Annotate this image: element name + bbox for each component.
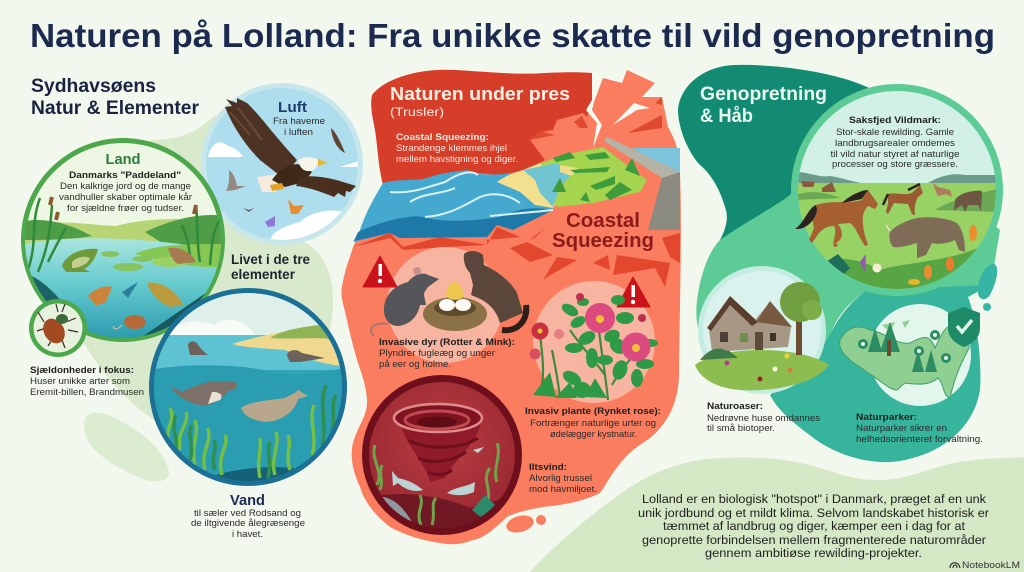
circle: Luft: i luften	[284, 127, 313, 138]
circle: Land: Danmarks "Paddeland"	[69, 170, 181, 181]
water channel	[523, 163, 573, 207]
text: Invasive dyr	[379, 337, 515, 370]
label: Vand	[191, 492, 305, 540]
label: Vand: Vand	[230, 492, 265, 509]
shards below waves	[353, 227, 680, 287]
background blob: left pale green	[40, 115, 333, 430]
seagrass	[168, 405, 314, 478]
text: Invasiv plante: ødelægger kystnatur.	[550, 429, 637, 440]
label: Coastal Squeezing: Squeezing	[552, 229, 654, 252]
text: Invasive dyr: Plyndrer fugleæg og unger	[379, 348, 495, 359]
label: Livet i de tre elementer: elementer	[231, 267, 296, 282]
text: Sjældonheder i fokus: Eremit-billen, Brandmusen	[30, 387, 144, 398]
salmon background	[341, 70, 681, 544]
sea behind dike	[632, 148, 680, 176]
label: Vand: de iltgivende ålegræsenge	[191, 518, 305, 529]
text: Coastal Squeezing threat: Coastal Squeezing:	[396, 132, 489, 143]
text: Invasiv plante: Invasiv plante (Rynket rose):	[525, 406, 661, 417]
text: Sjældonheder i fokus	[30, 365, 144, 398]
label: Land: Land	[106, 151, 140, 168]
text: Invasiv plante: Fortrænger naturlige urter og	[530, 418, 656, 429]
text block: summary: gennem ambitiøse rewilding-projekter.	[705, 546, 922, 560]
icon: eagle	[225, 98, 356, 197]
pink disc behind animals	[387, 247, 503, 363]
hills	[20, 219, 225, 280]
text block: summary: unik jordbund og et mildt klima. Selvom landskabet historisk er	[638, 506, 989, 520]
heading: Sydhavsøens Natur & Elementer: Sydhavsøens	[31, 76, 156, 97]
icon: mink	[464, 251, 526, 330]
panel: left section Sydhavsøens Natur & Elementer	[20, 76, 363, 540]
logo: NotebookLM: NotebookLM	[962, 560, 1020, 571]
icon: map of Lolland	[840, 326, 969, 398]
icon: shield with check	[948, 307, 980, 347]
tornado funnel	[401, 423, 481, 482]
icon: small birds and butterflies	[226, 128, 345, 227]
text block: summary: Lolland er en biologisk "hotspot" i Danmark, præget af en unk	[642, 492, 987, 506]
bank	[32, 276, 60, 302]
text: Coastal Squeezing threat	[396, 132, 518, 165]
text: Invasiv plante	[525, 406, 661, 440]
fish	[392, 471, 423, 491]
panel: Naturen under pres	[341, 70, 681, 544]
text block: summary: tæmmet af landbrug og diger, kæmper een i dag for at	[663, 519, 966, 533]
label: Coastal Squeezing: Coastal	[566, 209, 640, 232]
text: Invasive dyr: Invasive dyr (Rotter & Mink):	[379, 337, 515, 348]
label: Luft: Luft	[278, 99, 307, 116]
label: Livet i de tre elementer	[231, 252, 310, 282]
text: Naturparker: Naturparker sikrer en	[856, 423, 947, 434]
wetland	[540, 147, 647, 207]
beach	[232, 326, 340, 366]
sky	[170, 293, 326, 335]
circle: Saksfjed Vildmark: processer og store græssere.	[832, 159, 958, 170]
icon: bison	[886, 217, 965, 258]
label: Livet i de tre elementer: Livet i de tre	[231, 252, 310, 267]
label: Vand: til sæler ved Rodsand og	[194, 508, 301, 519]
circle: Saksfjed Vildmark: Stor-skale rewilding. Gamle	[836, 127, 954, 138]
circle: Land	[20, 138, 225, 345]
circle: Naturparker	[840, 304, 980, 406]
icon: big horse	[795, 190, 878, 247]
beach	[497, 163, 565, 208]
icon: frogs and mouse	[62, 248, 196, 329]
text: Naturen under pres heading	[390, 83, 570, 119]
text: Sjældonheder i fokus: Huser unikke arter som	[30, 376, 130, 387]
clouds	[208, 142, 243, 157]
mid green shape	[696, 110, 1000, 340]
background blob: small pale green	[84, 413, 169, 481]
text: Iltsvind: Iltsvind:	[529, 462, 567, 473]
icon: ruined house and tree	[695, 350, 829, 390]
circle: Land: for sjældne frøer og tudser.	[67, 203, 184, 214]
cracks	[586, 70, 603, 148]
title: Naturen på Lolland: Fra unikke skatte til vild genopretning	[30, 17, 995, 54]
seaweed	[374, 443, 498, 525]
text block: summary: genoprette forbindelsen mellem fragmenterede naturområder	[642, 533, 986, 547]
text: Naturparker: Naturparker:	[856, 412, 917, 423]
heading: Genopretning & Håb: Genopretning	[700, 83, 827, 105]
text: Invasive dyr: på eer og holme.	[379, 359, 451, 370]
circle: Land: Den kalkrige jord og de mange	[60, 181, 191, 192]
icon: seals	[170, 341, 325, 422]
marsh tufts	[552, 152, 640, 202]
blue waves	[353, 170, 553, 242]
background blob: bottom summary green	[530, 457, 1024, 572]
icon: warning triangle left	[363, 256, 397, 287]
seabed	[154, 365, 342, 478]
shards upper right	[530, 97, 662, 140]
circle: Luft: Fra haveme	[273, 116, 325, 127]
dark red header shape	[371, 70, 592, 185]
text: Iltsvind: Alvorlig trussel	[529, 473, 592, 484]
text: Naturoaser: Nedrøvne huse omdannes	[707, 413, 820, 424]
heading: Genopretning & Håb	[700, 83, 827, 127]
text: Naturoaser: Naturoaser:	[707, 401, 763, 412]
label: Vand: i havet.	[232, 529, 263, 540]
icon: rat	[371, 267, 439, 336]
heading: Sydhavsøens Natur & Elementer: Natur & Elementer	[31, 98, 200, 119]
teal shape	[770, 285, 990, 462]
text: Iltsvind: mod havmiljoet.	[529, 484, 597, 495]
text: Naturparker: helhedsorienteret forvaltning.	[856, 434, 983, 445]
text: Naturen under pres heading: Naturen under pres	[390, 83, 570, 104]
circle: Saksfjed Vildmark	[790, 84, 1005, 296]
circle: Iltsvind tornado	[362, 375, 522, 535]
text: Sjældonheder i fokus: Sjældonheder i fokus:	[30, 365, 134, 376]
icon: rose bush	[530, 293, 658, 400]
icon: beetle badge	[29, 299, 87, 357]
dike wall	[648, 172, 680, 230]
text: Saksfjed Vildmark: Saksfjed Vildmark:	[849, 115, 941, 126]
text: Naturen under pres heading: (Trusler)	[390, 107, 444, 119]
icon: second horse	[883, 184, 923, 215]
text: Naturoaser	[707, 401, 820, 434]
label: Coastal Squeezing	[552, 209, 654, 252]
reeds	[28, 198, 222, 272]
text: Coastal Squeezing threat: mellem havstigning og diger.	[396, 154, 518, 165]
circle: Vand	[149, 288, 350, 490]
circle: Saksfjed Vildmark: til vild natur styret af naturlige	[830, 149, 960, 160]
text block: summary	[638, 492, 989, 560]
text: Naturparker	[856, 412, 983, 445]
pond	[25, 238, 220, 338]
circle: Saksfjed Vildmark: landbrugsarealer omdemes	[835, 138, 955, 149]
panel: Genopretning & Håb	[678, 65, 1005, 462]
circle: Land: vandhuller skaber optimale kår	[59, 192, 192, 203]
icon: warning triangle right	[617, 277, 650, 307]
small drops	[504, 513, 536, 535]
text: Naturoaser: til små biotoper.	[707, 423, 775, 434]
surface sea	[150, 335, 350, 370]
dark teal shape	[678, 65, 880, 240]
text: Iltsvind	[529, 462, 597, 495]
heading: Sydhavsøens Natur & Elementer	[31, 76, 200, 119]
circle: Luft	[201, 83, 363, 245]
circle: Naturoaser	[695, 266, 829, 394]
icon: distant animals	[801, 181, 982, 212]
drops	[978, 264, 997, 299]
text: Coastal Squeezing threat: Strandenge klemmes ihjel	[396, 143, 507, 154]
pink disc behind rose	[533, 281, 655, 403]
icon: nest with eggs and chick	[423, 282, 487, 331]
heading: Genopretning & Håb: & Håb	[700, 104, 753, 127]
